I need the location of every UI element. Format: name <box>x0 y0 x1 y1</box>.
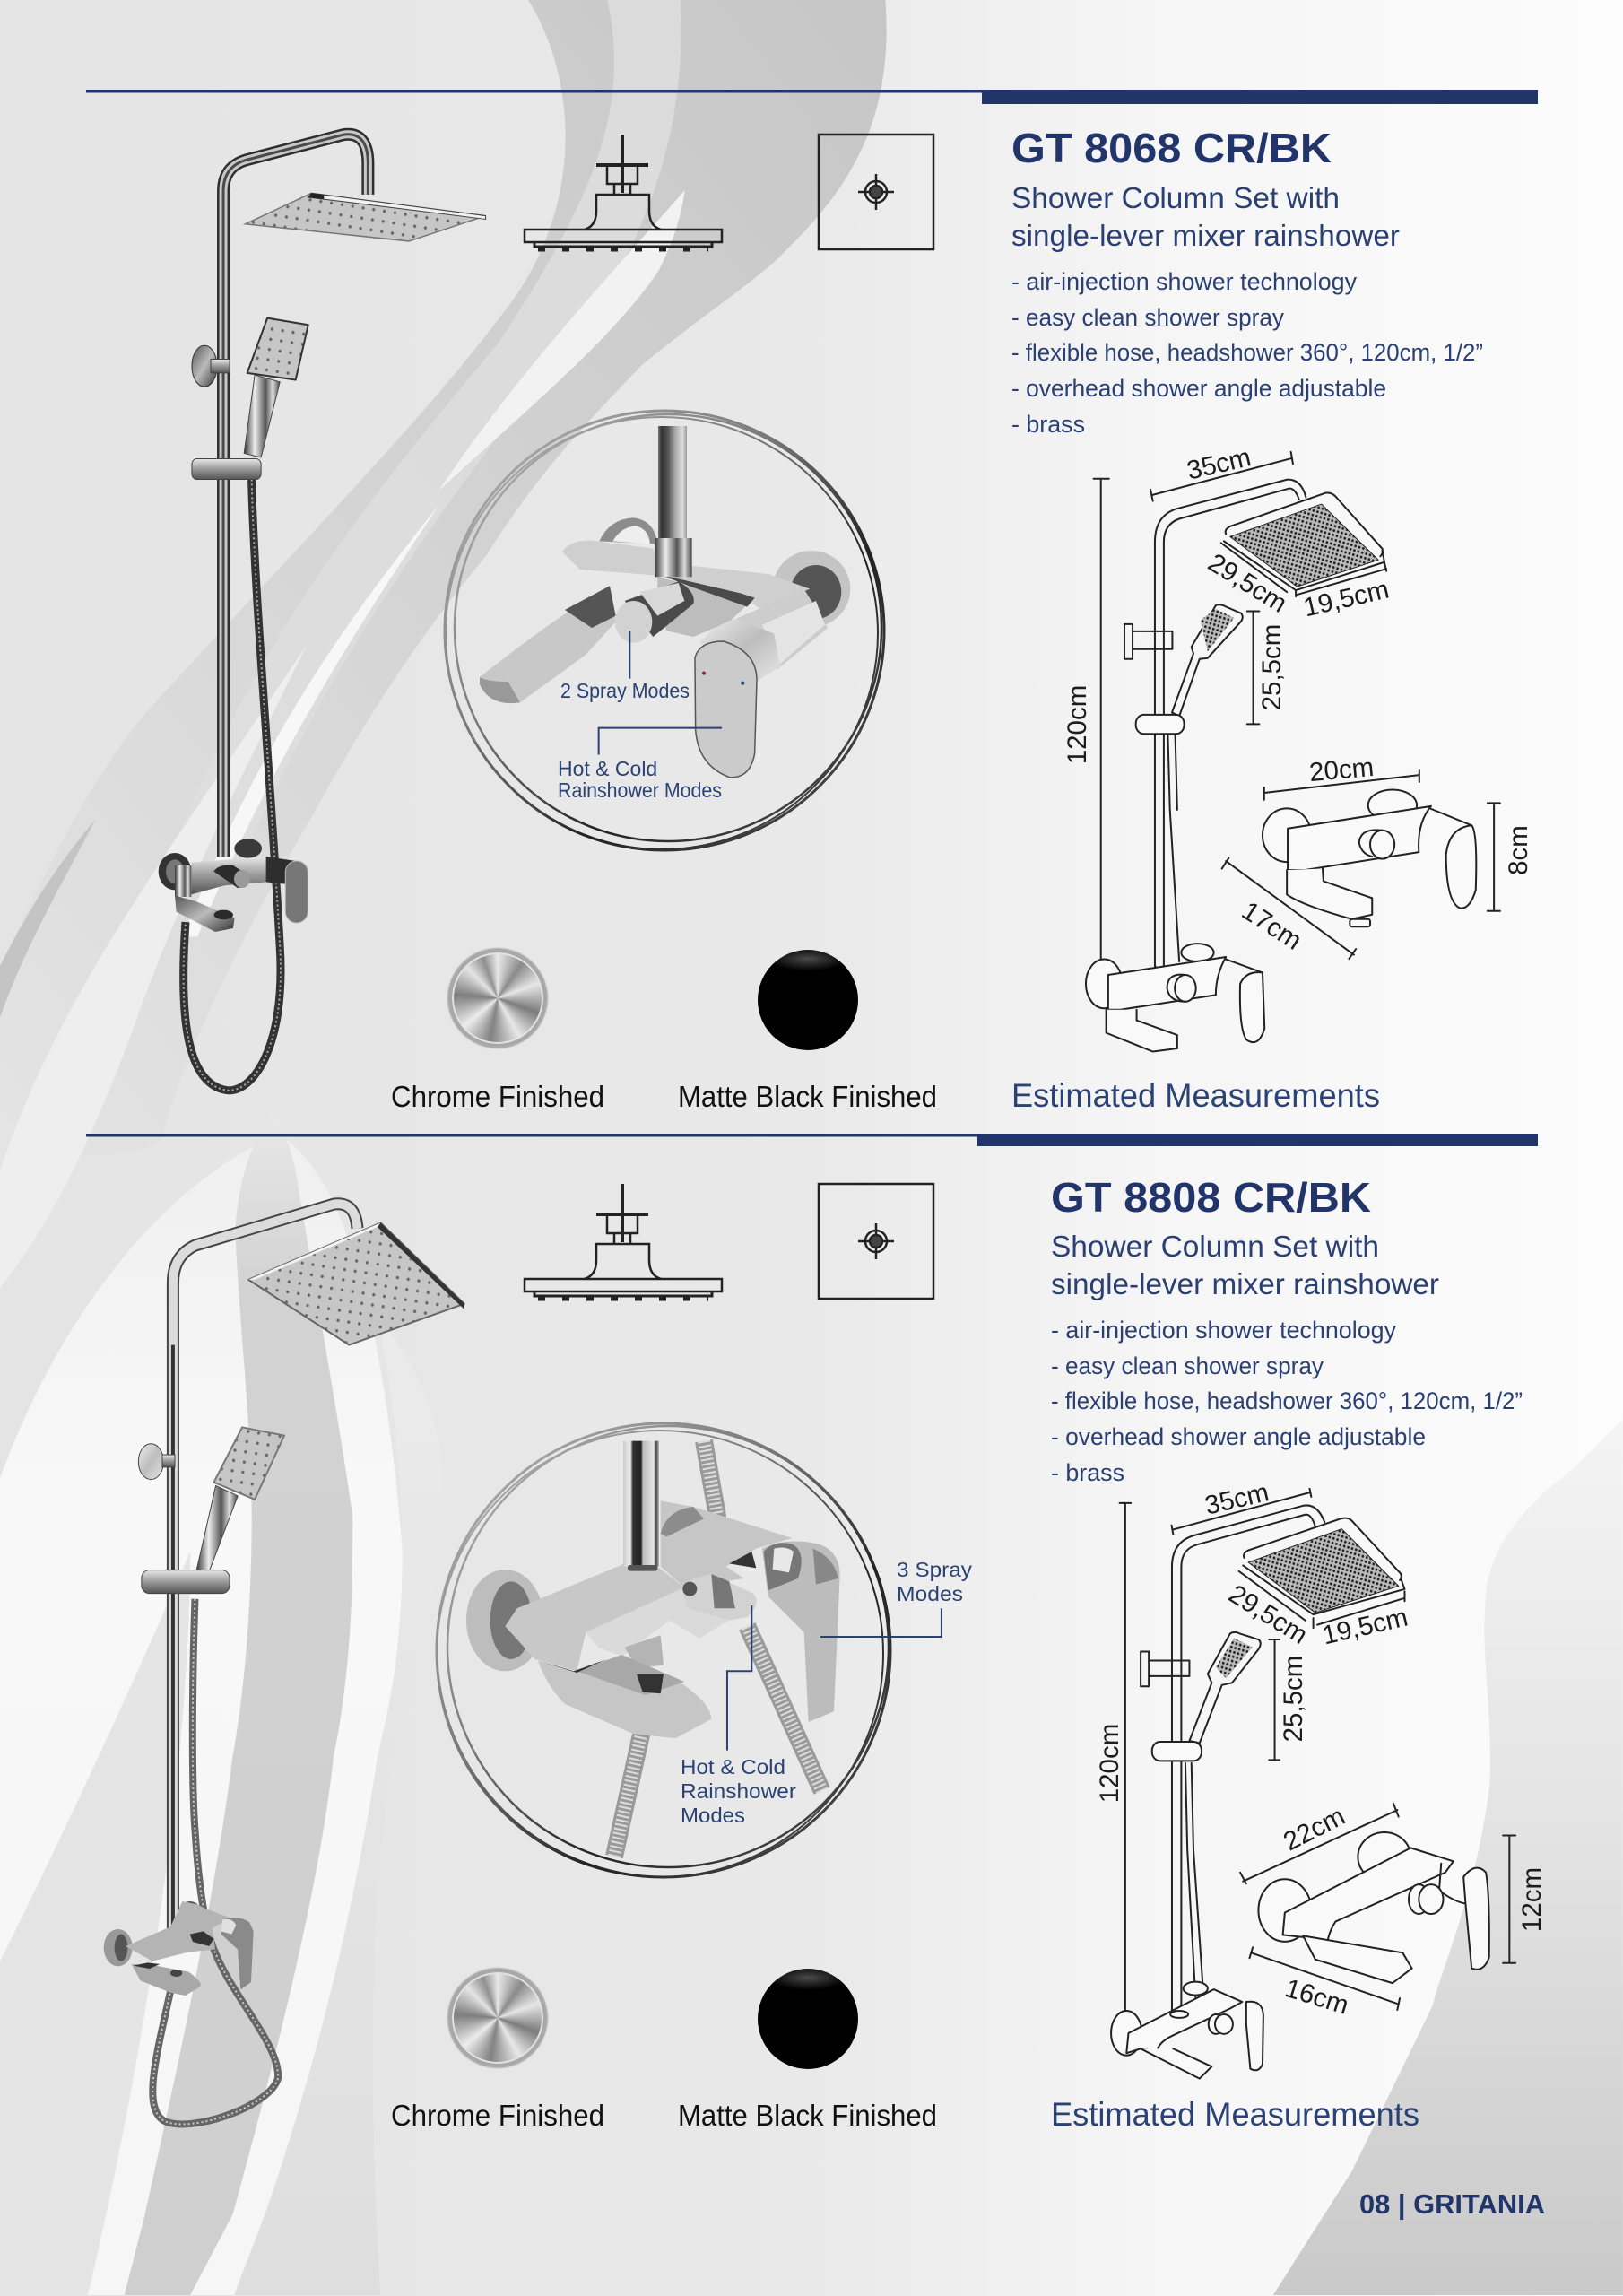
product text: GT 8808 <box>1051 1174 1523 1486</box>
product text: GT 8068: - easy clean shower spray <box>1011 304 1284 331</box>
hose <box>152 1599 278 2124</box>
photo: shower column GT 8068 <box>159 135 486 1091</box>
dimension labels: 35cm <box>1202 1477 1271 1521</box>
callout: Hot & Cold Rainshower Modes: Modes <box>681 1804 745 1827</box>
product text: GT 8808: - air-injection shower technology <box>1051 1317 1396 1344</box>
product text: GT 8808: - brass <box>1051 1459 1124 1486</box>
callout: Hot & Cold: Hot & Cold <box>558 757 657 780</box>
slider <box>142 1570 230 1594</box>
dimension labels: 8cm <box>1504 825 1533 875</box>
rain head <box>248 1222 464 1345</box>
product text: GT 8068: GT 8068 CR/BK <box>1011 125 1332 171</box>
magnified mixer: GT 8808 <box>437 1423 973 1877</box>
dimension labels: 35cm <box>1184 442 1254 486</box>
callout: 3 Spray Modes: 3 Spray <box>897 1558 973 1581</box>
footer: page number and brand: 08 | GRITANIA <box>1359 2188 1545 2220</box>
swatch: matte black 2 <box>758 1969 858 2069</box>
dimension labels <box>1063 442 1533 956</box>
wall bracket <box>138 1444 175 1480</box>
product text: GT 8068: - brass <box>1011 411 1085 438</box>
swatch: chrome 2 <box>448 1969 547 2067</box>
wall bracket <box>192 345 230 387</box>
product text: GT 8808: - easy clean shower spray <box>1051 1352 1324 1379</box>
dimension labels <box>1095 1477 1547 2021</box>
top rule: second product <box>86 1134 1538 1146</box>
hand shower <box>196 1427 284 1576</box>
dimension labels: 25,5cm <box>1279 1656 1308 1742</box>
hose <box>184 479 281 1091</box>
product text: GT 8808: single-lever mixer rainshower <box>1051 1267 1439 1300</box>
product text: GT 8068: - flexible hose, headshower 360°, 120cm, 1/2” <box>1011 339 1483 366</box>
dimension labels: 17cm <box>1237 896 1306 956</box>
callout: Hot & Cold Rainshower Modes <box>681 1755 796 1827</box>
callout: 3 Spray Modes: Modes <box>897 1582 963 1605</box>
mixer parts <box>466 1441 840 1857</box>
dimension labels: 120cm <box>1063 685 1092 764</box>
icon: top view of rain head <box>819 135 933 249</box>
leaders <box>599 631 722 755</box>
measurement drawing: GT 8068 <box>1063 442 1533 1052</box>
dimension labels: 12cm <box>1517 1867 1547 1932</box>
caption: estimated measurements 2: Estimated Measurements <box>1051 2096 1419 2133</box>
product text: GT 8068: - overhead shower angle adjustable <box>1011 375 1386 402</box>
product text: GT 8068: Shower Column Set with <box>1011 181 1340 214</box>
dimension labels: 19,5cm <box>1300 575 1392 622</box>
rings <box>437 1423 890 1877</box>
product text: GT 8808: Shower Column Set with <box>1051 1230 1379 1263</box>
dimension labels: 22cm <box>1279 1801 1350 1857</box>
measurement drawing: GT 8808 <box>1095 1477 1547 2079</box>
rain head <box>246 193 486 241</box>
dimension labels: 29,5cm <box>1202 548 1292 619</box>
top rule: first product <box>86 90 1538 104</box>
finish label: matte black 2: Matte Black Finished <box>678 2099 937 2132</box>
mixer <box>159 839 308 932</box>
magnified mixer: GT 8068 <box>445 411 884 850</box>
finish label: chrome: Chrome Finished <box>391 1080 604 1113</box>
dimension labels: 16cm <box>1281 1973 1352 2021</box>
photo: shower column GT 8808 <box>104 1204 464 2124</box>
product text: GT 8808: - overhead shower angle adjustable <box>1051 1423 1426 1450</box>
finish label: chrome 2: Chrome Finished <box>391 2099 604 2132</box>
icon: side view of rain head <box>525 135 722 249</box>
callout: Hot & Cold: Rainshower Modes <box>558 778 722 802</box>
rail and arm <box>173 1204 357 1928</box>
leaders <box>727 1605 942 1751</box>
swatch: chrome 1 <box>448 949 547 1048</box>
callout: Hot & Cold Rainshower Modes: Rainshower <box>681 1779 796 1803</box>
callout: 2 Spray Modes: 2 Spray Modes <box>560 679 690 702</box>
callout: Hot & Cold Rainshower Modes: Hot & Cold <box>681 1755 785 1779</box>
swatch: matte black 1 <box>758 950 858 1050</box>
finish label: matte black: Matte Black Finished <box>678 1080 937 1113</box>
dimension labels: 29,5cm <box>1223 1579 1313 1650</box>
rail and arm <box>223 135 368 857</box>
product text: GT 8808: - flexible hose, headshower 360°, 120cm, 1/2” <box>1051 1387 1523 1414</box>
dimension labels: 120cm <box>1095 1724 1124 1803</box>
mixer <box>104 1901 254 1996</box>
icon: side view of rain head 2 <box>525 1184 722 1299</box>
product text: GT 8068 <box>1011 125 1483 438</box>
product text: GT 8808: GT 8808 CR/BK <box>1051 1174 1371 1221</box>
mixer parts <box>480 426 850 778</box>
dimension labels: 19,5cm <box>1319 1603 1410 1650</box>
dimension labels: 20cm <box>1308 752 1376 787</box>
product text: GT 8068: - air-injection shower technology <box>1011 268 1357 295</box>
caption: estimated measurements 1: Estimated Measurements <box>1011 1077 1380 1114</box>
callout: Hot & Cold <box>558 757 722 802</box>
slider <box>192 459 261 479</box>
dimension labels: 25,5cm <box>1257 624 1287 710</box>
rings <box>445 411 884 850</box>
hand shower <box>244 318 308 457</box>
icon: top view of rain head 2 <box>819 1184 933 1299</box>
callout: 3 Spray Modes <box>897 1558 973 1605</box>
product text: GT 8068: single-lever mixer rainshower <box>1011 219 1400 252</box>
